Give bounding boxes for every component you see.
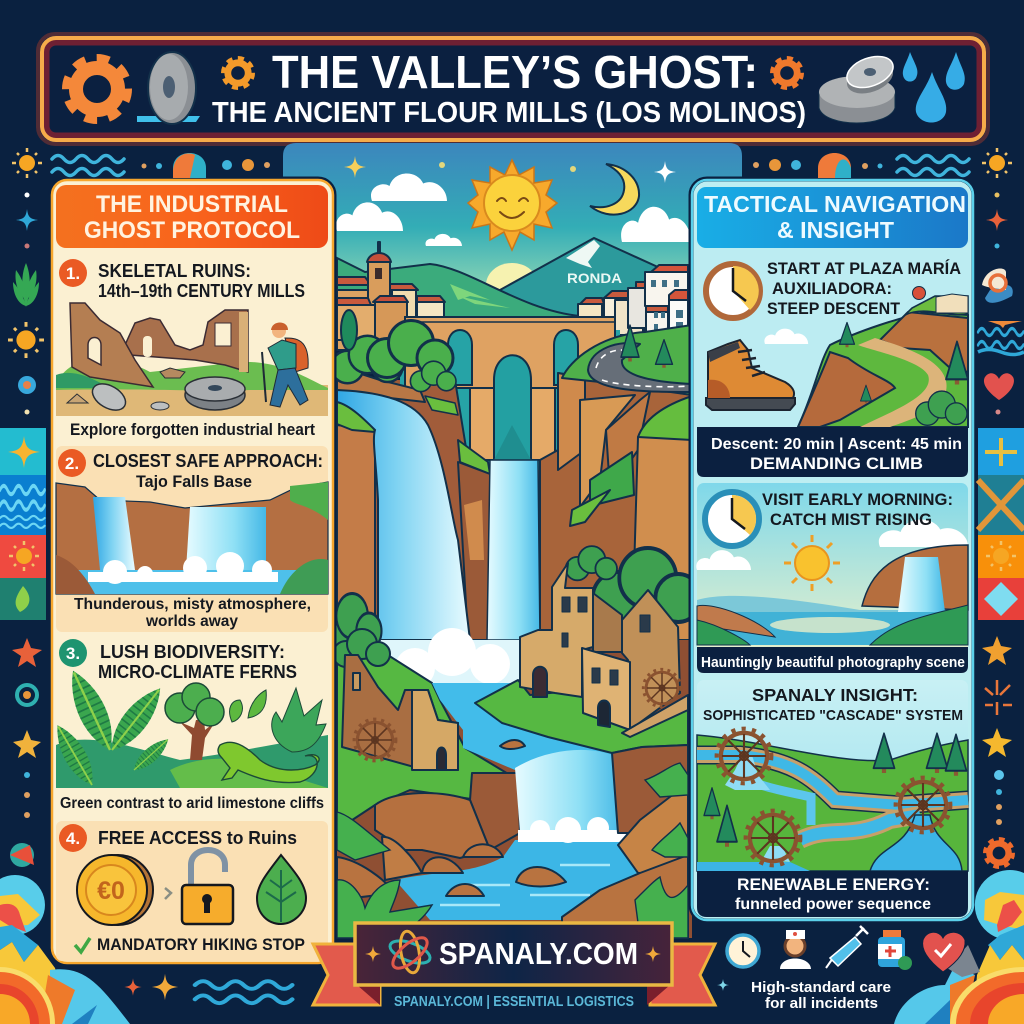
ribbon [313, 944, 715, 1005]
number badge 2 [58, 449, 86, 477]
decoration: left column [0, 192, 46, 867]
section 2 caption: Thunderous, misty atmosphere, [74, 596, 311, 613]
icon: heart with check [923, 932, 965, 972]
section 2 caption: worlds away [145, 613, 238, 630]
right waterfall [487, 460, 540, 640]
icon: stacked millstones [819, 51, 897, 123]
stars and dots in sky [344, 156, 676, 183]
number badge 3: 3. [66, 644, 80, 663]
decoration: bottom-right corner [894, 870, 1024, 1024]
section 3 heading [98, 642, 297, 682]
mountains [337, 238, 702, 335]
mist at base of the falls [378, 628, 548, 688]
green trees behind mills [566, 546, 701, 624]
left bushes lower [322, 594, 390, 667]
care icons row [717, 926, 912, 1012]
icon: zero euro coin: €0 [97, 877, 125, 905]
small waves [195, 981, 292, 1003]
star right [645, 946, 661, 962]
icon: medicine bottle [878, 930, 912, 970]
illustration: cascade system [697, 729, 968, 871]
panel: tactical navigation and insight [691, 179, 974, 921]
subtitle: SPANALY.COM | ESSENTIAL LOGISTICS [394, 994, 634, 1010]
section heading: SOPHISTICATED "CASCADE" SYSTEM [703, 707, 963, 724]
number badge 2: 2. [65, 454, 79, 473]
section heading: VISIT EARLY MORNING: [762, 491, 953, 509]
foreground leaves [337, 763, 688, 938]
panel header [697, 187, 968, 248]
brown gorge base [337, 380, 692, 710]
star [717, 979, 729, 991]
icon: millstone on water [137, 52, 200, 124]
icon: hiking boot [706, 340, 795, 410]
section 4 heading: FREE ACCESS to Ruins [98, 828, 297, 848]
illustration: cliff trail [798, 286, 968, 427]
river rocks [422, 740, 566, 896]
icon: nurse [780, 930, 811, 969]
section 4: free access [56, 821, 328, 961]
icon: clock [727, 935, 759, 967]
section 1 heading [98, 261, 305, 301]
section: start at plaza [695, 250, 970, 477]
section 2: closest safe approach [56, 446, 328, 632]
lower scene base [337, 640, 692, 938]
renewable energy strip [697, 871, 968, 917]
section 2 caption [74, 596, 311, 630]
sky [283, 143, 742, 330]
right bank [475, 680, 688, 938]
hiker [262, 322, 308, 407]
section heading [767, 259, 961, 318]
care caption: High-standard care [751, 980, 891, 996]
renewable energy strip: RENEWABLE ENERGY: [737, 876, 930, 894]
teal gorge opening [400, 330, 620, 470]
arched bridge [405, 317, 615, 460]
large left waterfall [337, 390, 470, 640]
section 1 heading: SKELETAL RUINS: [98, 261, 251, 281]
decoration: bottom-left corner [0, 875, 292, 1024]
icon: open padlock [182, 850, 233, 924]
number badge 1 [59, 259, 87, 287]
crescent moon [590, 164, 639, 215]
section: spanaly insight [697, 680, 968, 917]
left rocks [337, 773, 520, 900]
title line 2: THE ANCIENT FLOUR MILLS (LOS MOLINOS) [212, 97, 806, 129]
clouds [336, 173, 691, 246]
icon: syringe [826, 926, 868, 968]
section heading [762, 491, 953, 529]
care caption [751, 980, 891, 1012]
title line 1: THE VALLEY’S GHOST: [272, 46, 758, 98]
section 3 heading: LUSH BIODIVERSITY: [100, 642, 285, 662]
river and pool [395, 683, 640, 920]
section 3 heading: MICRO-CLIMATE FERNS [98, 662, 297, 682]
section: visit early morning [696, 483, 968, 673]
section 1 heading: 14th–19th CENTURY MILLS [98, 281, 305, 301]
illustration: sunrise over water [696, 519, 968, 645]
right town [578, 265, 688, 338]
road-side trees [621, 325, 672, 368]
icon: blue clock [705, 492, 759, 546]
smiling sun [468, 160, 557, 250]
section 2 heading [93, 451, 323, 491]
illustration: ferns, tree and lizard [48, 665, 328, 790]
illustration: ruins and hiker [56, 303, 328, 416]
section 2 heading: Tajo Falls Base [136, 473, 252, 491]
center scene: Ronda gorge [283, 143, 742, 938]
brand name: SPANALY.COM [439, 936, 638, 971]
section heading: AUXILIADORA: [772, 280, 892, 298]
section 3 caption: Green contrast to arid limestone cliffs [60, 795, 324, 812]
left cypress [341, 310, 357, 350]
illustration: twin falls [56, 482, 328, 594]
panel header [56, 185, 328, 248]
section 1: skeletal ruins [56, 252, 328, 440]
icon: brown clock [706, 264, 760, 318]
mandatory stop label: MANDATORY HIKING STOP [97, 935, 305, 954]
panel header: TACTICAL NAVIGATION [704, 191, 966, 217]
section heading [703, 685, 963, 724]
big mill ruins [520, 563, 688, 737]
left mill ruin [342, 655, 458, 770]
banner: spanaly.com [313, 923, 715, 1010]
logo mark [387, 930, 433, 974]
icon: zero euro coin [77, 855, 153, 925]
care caption: for all incidents [765, 996, 878, 1012]
label: Ronda: RONDA [567, 270, 622, 286]
section heading: CATCH MIST RISING [770, 511, 932, 529]
decoration: right column [978, 192, 1024, 867]
check mark [75, 938, 90, 952]
panel header: GHOST PROTOCOL [84, 217, 300, 244]
panel: the industrial ghost protocol [48, 179, 334, 964]
icon: large gear [67, 59, 127, 119]
icon: small gear right [773, 59, 801, 87]
arrow [165, 888, 171, 899]
section 1 caption: Explore forgotten industrial heart [70, 421, 315, 439]
panel header: & INSIGHT [777, 217, 894, 243]
panel header: THE INDUSTRIAL [96, 191, 288, 218]
time strip: DEMANDING CLIMB [750, 455, 923, 473]
right cliffs with road [540, 325, 692, 700]
left upper cliffs [337, 353, 490, 650]
logo plate [355, 923, 672, 985]
icon: green leaf [257, 855, 306, 924]
number badge 4 [59, 824, 87, 852]
left town [337, 242, 445, 350]
section heading: START AT PLAZA MARÍA [767, 259, 961, 278]
left bushes [331, 320, 456, 392]
number badge 1: 1. [66, 264, 80, 283]
gray beam [947, 945, 980, 977]
section 3: lush biodiversity [48, 637, 328, 820]
small stars [124, 974, 178, 1000]
sun glow on horizon [486, 263, 538, 307]
icon: small gear left [224, 59, 252, 87]
time strip [697, 427, 968, 477]
title banner [38, 34, 988, 144]
section heading: SPANALY INSIGHT: [752, 685, 918, 705]
photography caption strip [697, 647, 968, 673]
number badge 3 [59, 639, 87, 667]
star left [365, 946, 381, 962]
left bank [337, 640, 510, 830]
renewable energy strip: funneled power sequence [735, 896, 931, 913]
number badge 4: 4. [66, 829, 80, 848]
small cloud [764, 329, 808, 344]
time strip: Descent: 20 min | Ascent: 45 min [711, 436, 962, 453]
icon: water drops [903, 52, 965, 122]
photography caption strip: Hauntingly beautiful photography scene [701, 655, 965, 671]
decoration: top strips [12, 148, 1012, 178]
section 2 heading: CLOSEST SAFE APPROACH: [93, 451, 323, 471]
section heading: STEEP DESCENT [767, 300, 900, 318]
